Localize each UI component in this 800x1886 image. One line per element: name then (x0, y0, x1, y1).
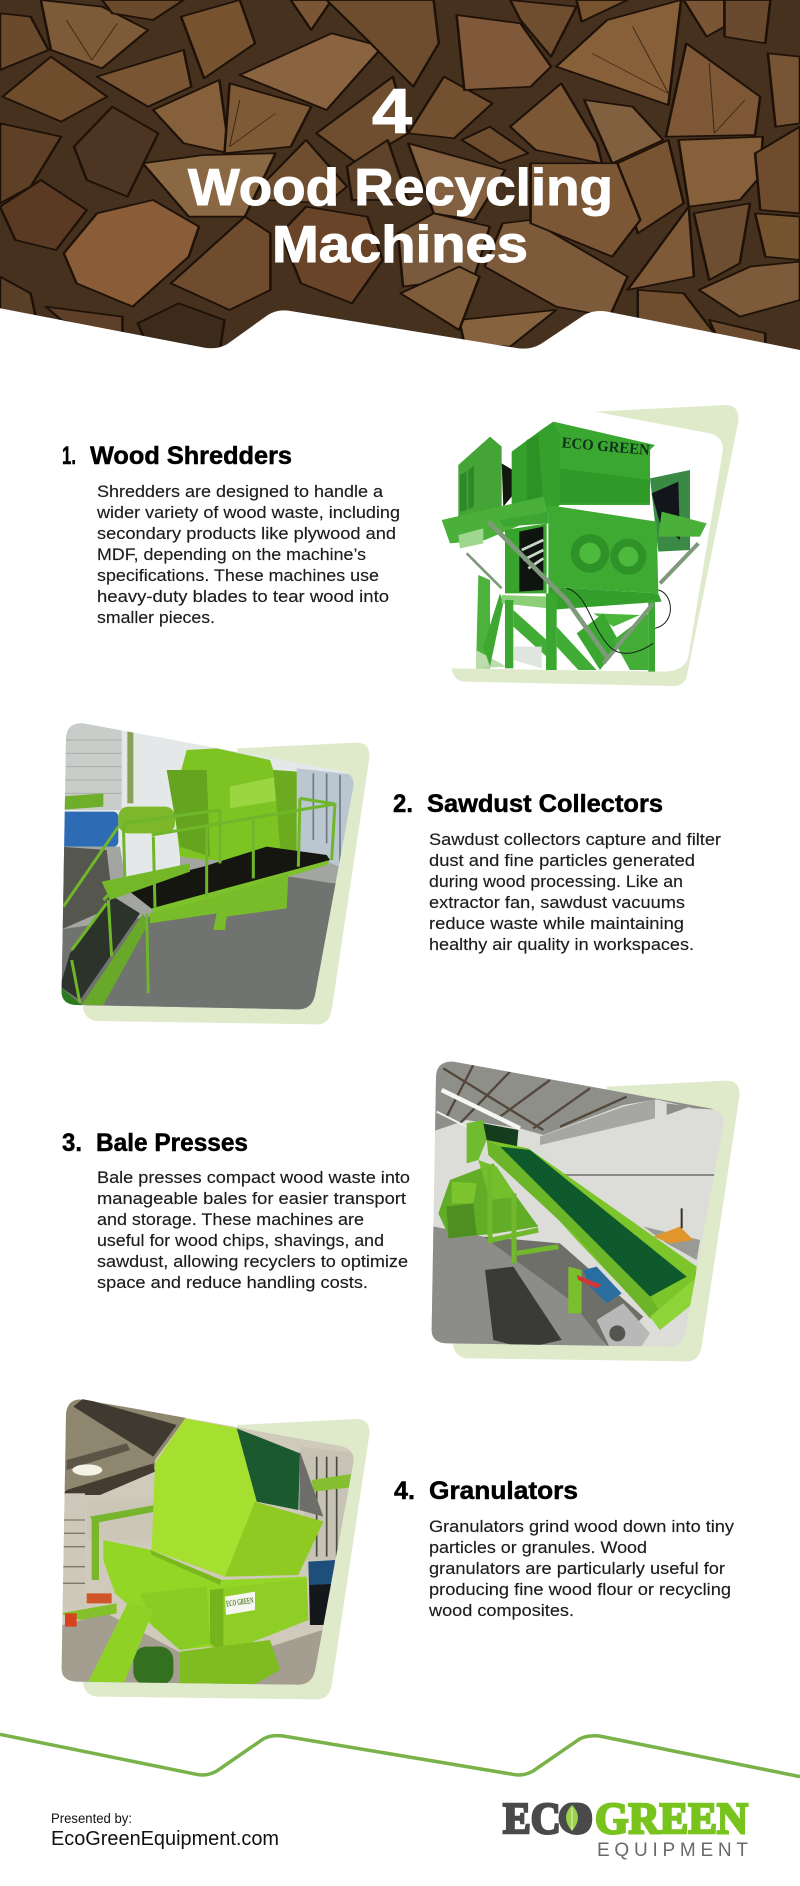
section 4: Granulators text: Granulators (429, 1477, 578, 1505)
section 4: granulator machine image: ECO GREEN (226, 1595, 254, 1609)
section 1: shredder machine image: ECO GREEN (561, 434, 650, 459)
section 4: granulator machine image (57, 1397, 369, 1699)
section 3: bale press conveyor image (427, 1057, 739, 1361)
section 4: Granulators text (394, 1477, 735, 1620)
section 2: Sawdust Collectors text: extractor fan, sawdust vacuums (429, 893, 685, 912)
section 4: Granulators text: 4. (394, 1477, 415, 1505)
footer: presented by text: EcoGreenEquipment.com (51, 1827, 279, 1850)
section 1: Wood Shredders text (62, 442, 400, 627)
section 3: Bale Presses text: useful for wood chips, shavings, and (97, 1231, 384, 1250)
title: Wood Recycling (188, 159, 613, 217)
section 2: Sawdust Collectors text: 2. (393, 790, 413, 818)
section 1: Wood Shredders text: 1. (62, 442, 76, 470)
section 3: Bale Presses text (62, 1129, 410, 1292)
title: Machines (272, 216, 528, 274)
header: white wave edge (0, 308, 800, 387)
section 2: sawdust collector machine image (57, 717, 369, 1024)
title (188, 77, 613, 274)
footer: Eco Green Equipment logo: EQUIPMENT (597, 1840, 748, 1861)
footer: presented by text: Presented by: (51, 1811, 132, 1826)
section 1: Wood Shredders text: heavy-duty blades to tear wood into (97, 587, 389, 606)
section 3: Bale Presses text: sawdust, allowing recyclers to optimize (97, 1252, 408, 1271)
footer: Eco Green Equipment logo: ECO (503, 1794, 593, 1843)
section 1: shredder machine image (442, 405, 738, 686)
section 2: Sawdust Collectors text: reduce waste while maintaining (429, 914, 684, 933)
footer: green wave line (0, 1734, 800, 1777)
section 2: Sawdust Collectors text: dust and fine particles generated (429, 851, 695, 870)
section 2: Sawdust Collectors text: healthy air quality in workspaces. (429, 935, 694, 954)
section 3: Bale Presses text: manageable bales for easier transport (97, 1189, 406, 1208)
section 3: Bale Presses text: and storage. These machines are (97, 1210, 364, 1229)
title: 4 (372, 77, 412, 147)
footer: Eco Green Equipment logo (503, 1794, 748, 1861)
section 2: Sawdust Collectors text (393, 790, 721, 954)
section 1: Wood Shredders text: secondary products like plywood and (97, 524, 396, 543)
section 4: Granulators text: wood composites. (428, 1601, 574, 1620)
section 2: Sawdust Collectors text: Sawdust collectors capture and filter (429, 830, 721, 849)
section 3: Bale Presses text: space and reduce handling costs. (97, 1273, 368, 1292)
section 3: Bale Presses text: 3. (62, 1129, 82, 1157)
section 4: Granulators text: producing fine wood flour or recycling (429, 1580, 731, 1599)
footer: Eco Green Equipment logo: GREEN (595, 1794, 748, 1843)
footer: presented by text (51, 1811, 279, 1850)
section 4: Granulators text: particles or granules. Wood (429, 1538, 647, 1557)
section 2: Sawdust Collectors text: Sawdust Collectors (427, 790, 663, 818)
section 1: Wood Shredders text: specifications. These machines use (97, 566, 379, 585)
section 1: Wood Shredders text: smaller pieces. (97, 608, 215, 627)
section 1: Wood Shredders text: MDF, depending on the machine’s (97, 545, 366, 564)
section 1: Wood Shredders text: Wood Shredders (90, 442, 292, 470)
section 3: Bale Presses text: Bale presses compact wood waste into (97, 1168, 410, 1187)
section 4: Granulators text: Granulators grind wood down into tiny (429, 1517, 735, 1536)
section 1: Wood Shredders text: wider variety of wood waste, including (96, 503, 400, 522)
header: stacked firewood photo background (0, 0, 800, 362)
section 3: Bale Presses text: Bale Presses (96, 1129, 248, 1157)
section 4: Granulators text: granulators are particularly useful for (429, 1559, 725, 1578)
section 1: Wood Shredders text: Shredders are designed to handle a (97, 482, 384, 501)
section 2: Sawdust Collectors text: during wood processing. Like an (429, 872, 683, 891)
